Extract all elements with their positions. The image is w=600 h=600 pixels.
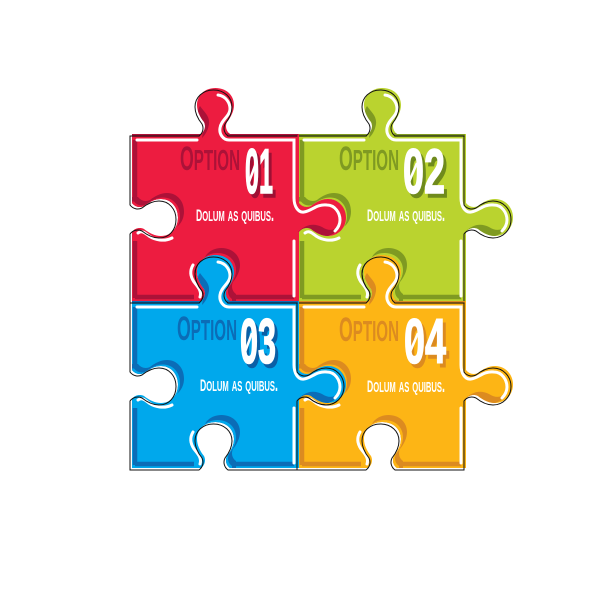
text: option 04 caption: Dolum as quibus.: [367, 374, 445, 397]
number: 04: 04: [404, 307, 446, 377]
heading: option 02: Option: [339, 132, 399, 179]
text: option 02 caption: Dolum as quibus.: [367, 203, 445, 226]
number: 01: [245, 137, 276, 211]
number: 04: [404, 307, 449, 381]
panel: option 01 red puzzle piece: [122, 88, 346, 312]
panel: option 04 orange puzzle piece: [289, 255, 513, 479]
heading: option 04: Option: [339, 303, 399, 350]
number: 02: [403, 137, 448, 211]
number: 04: 04: [407, 311, 449, 381]
panel: option 01 red puzzle piece: 01: [245, 137, 273, 207]
number: 02: 02: [406, 141, 448, 211]
number: 03: 03: [243, 311, 279, 381]
number: 03: 03: [240, 307, 276, 377]
panel: option 01 red puzzle piece: 01: [248, 141, 276, 211]
number: 02: 02: [403, 137, 445, 207]
number: 03: [240, 307, 279, 381]
panel: option 03 blue puzzle piece: [122, 255, 346, 479]
heading: option 03: Option: [177, 302, 237, 349]
text: option 03 caption: Dolum as quibus.: [200, 373, 278, 396]
text: option 01 caption: Dolum as quibus.: [196, 203, 274, 226]
panel: option 02 green puzzle piece: [289, 88, 513, 312]
heading: option 01: Option: [180, 132, 240, 179]
